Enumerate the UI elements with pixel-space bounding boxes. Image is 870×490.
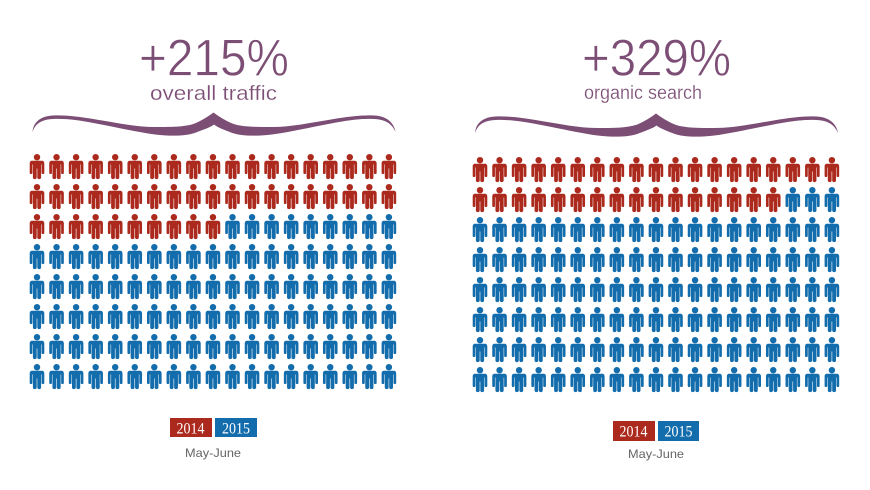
panel: overall traffic — [30, 30, 396, 460]
figures row 3 — [473, 217, 839, 242]
heading: +215%: +215% — [139, 30, 289, 88]
figures row 4 — [30, 244, 396, 269]
figures row 1 — [473, 157, 839, 182]
legend: 2014: 2014 — [176, 420, 204, 438]
figures row 6 — [473, 307, 839, 332]
figures row 3 — [30, 214, 396, 239]
legend — [170, 418, 257, 438]
figures row 7 — [473, 337, 839, 362]
figures row 7 — [30, 334, 396, 359]
date label: May-June — [628, 447, 684, 461]
legend: 2015: 2015 — [664, 424, 692, 440]
figures row 2 — [473, 187, 839, 212]
figures row 4 — [473, 247, 839, 272]
figures row 6 — [30, 304, 396, 329]
date label: May-June — [185, 446, 241, 460]
brace — [32, 112, 396, 136]
figures row 1 — [30, 154, 396, 179]
figures row 8 — [473, 367, 839, 392]
brace — [475, 114, 838, 137]
figures row 8 — [30, 364, 396, 389]
figures row 2 — [30, 184, 396, 209]
subheading: overall traffic: overall traffic — [150, 83, 277, 105]
legend — [613, 421, 699, 441]
legend: 2014: 2014 — [620, 424, 648, 440]
heading: +329%: +329% — [582, 30, 731, 88]
pictogram: 35 red 2014 figures and 117 blue 2015 figures — [473, 157, 839, 392]
panel: organic search — [473, 30, 839, 461]
figures row 5 — [473, 277, 839, 302]
subheading: organic search: organic search — [584, 83, 702, 104]
legend: 2015: 2015 — [222, 420, 250, 438]
pictogram: 48 red 2014 figures and 104 blue 2015 figures — [30, 154, 396, 389]
figures row 5 — [30, 274, 396, 299]
